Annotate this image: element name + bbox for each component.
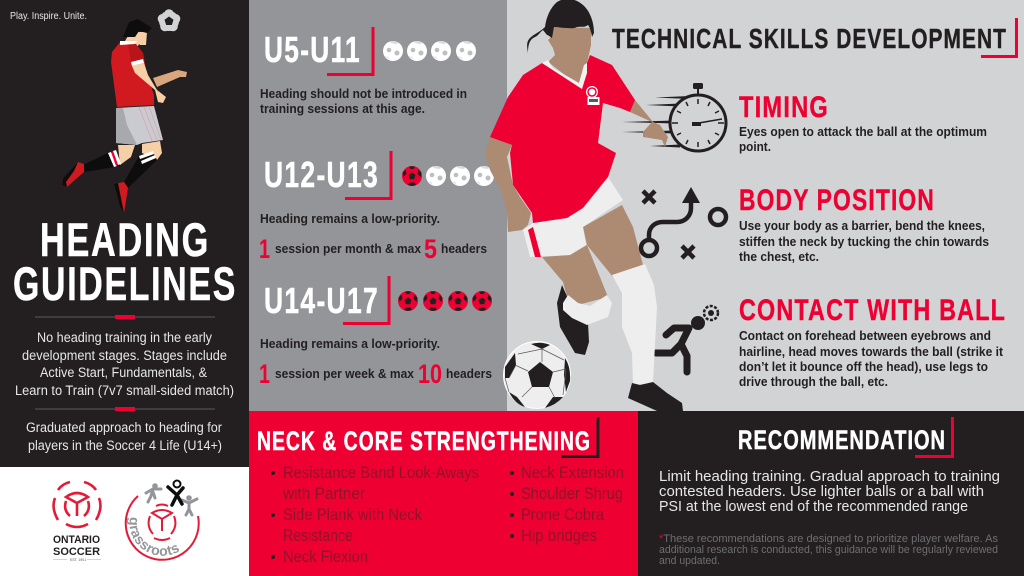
text block: early development stages: No heading training in the early [37, 330, 212, 345]
age group U12-U13: 1 [259, 234, 270, 264]
title: HEADING [40, 213, 210, 266]
skill: timing [739, 91, 987, 154]
skill: timing: TIMING [739, 91, 829, 124]
age group U5-U11: U5-U11 [264, 29, 361, 70]
panel: logos [0, 467, 249, 576]
skill: contact with ball: don’t let it bounce off the head), use legs to [739, 359, 988, 374]
skill: contact with ball: hairline, head moves towards the ball (strike it [739, 344, 1004, 359]
text block: graduated approach: players in the Soccer 4 Life (U14+) [28, 438, 222, 453]
list: left column exercises: Resistance Band Look-Aways [283, 463, 479, 482]
age group U14-U17: 10 [418, 359, 442, 389]
text block: early development stages: Learn to Train (7v7 small-sided match) [15, 383, 234, 398]
panel: heading guidelines sidebar [0, 0, 249, 468]
text block: early development stages: Active Start, Fundamentals, & [40, 365, 207, 380]
footnote: additional research is conducted, this guidance will be regularly reviewed [659, 544, 998, 556]
list: left column exercises: Side Plank with Neck [283, 505, 422, 524]
list: left column exercises: with Partner [282, 484, 365, 503]
age group U12-U13 [259, 151, 494, 264]
illustration: soccer ball [504, 342, 570, 408]
logo: Ontario Soccer: SOCCER [53, 546, 100, 558]
age group U12-U13: U12-U13 [264, 154, 379, 195]
logo: grassroots [124, 480, 200, 561]
text block: graduated approach: Graduated approach to heading for [26, 420, 222, 435]
age group U14-U17: U14-U17 [264, 280, 379, 321]
skill: body position: Use your body as a barrier, bend the knees, [739, 218, 985, 233]
text block: recommendation: Limit heading training. Gradual approach to training [659, 468, 1000, 485]
title [13, 213, 237, 310]
tagline: Play. Inspire. Unite. [10, 11, 87, 22]
logo: Ontario Soccer: EST. 1901 [70, 558, 86, 562]
skill: body position: BODY POSITION [739, 184, 935, 217]
panel: neck and core strengthening [249, 411, 638, 576]
footnote: and updated. [659, 555, 720, 567]
age group U12-U13: 5 [424, 234, 437, 264]
footnote [659, 533, 998, 567]
title: GUIDELINES [13, 257, 237, 310]
skill: body position: stiffen the neck by tucking the chin towards [739, 234, 989, 249]
text block: recommendation: PSI at the lowest end of the recommended range [659, 498, 968, 515]
panel: age groups [249, 0, 507, 411]
list: right column exercises: Shoulder Shrug [521, 484, 623, 503]
list: left column exercises: Resistance [283, 526, 353, 545]
list: left column exercises: Neck Flexion [283, 547, 368, 566]
text block: graduated approach [26, 420, 222, 453]
heading: neck and core: NECK & CORE STRENGTHENING [257, 426, 591, 456]
age group U14-U17: headers [446, 366, 492, 381]
icon: runner heading ball [656, 306, 718, 372]
age group U14-U17 [259, 276, 492, 389]
skill: body position [739, 184, 989, 264]
skill: body position: the chest, etc. [739, 249, 819, 264]
illustration: player heading the ball [62, 19, 187, 213]
heading: neck and core [257, 417, 598, 456]
text block: early development stages: development stages. Stages include [22, 348, 227, 363]
list: left column exercises [271, 463, 479, 566]
skill: timing: point. [739, 139, 771, 154]
skill: contact with ball: Contact on forehead between eyebrows and [739, 328, 991, 343]
text block: recommendation: contested headers. Use lighter balls or a ball with [659, 483, 984, 500]
panel: technical skills development [507, 0, 1024, 411]
logo: Ontario Soccer [53, 482, 101, 562]
logo: Ontario Soccer: ONTARIO [53, 534, 100, 546]
heading: recommendation [738, 417, 952, 456]
icon: stopwatch [622, 83, 726, 151]
age group U12-U13: headers [441, 241, 487, 256]
age group U5-U11: Heading should not be introduced in [260, 86, 467, 101]
age group U5-U11: training sessions at this age. [260, 101, 425, 116]
age group U12-U13: session per month & max [275, 241, 422, 256]
logo: grassroots: grassroots [126, 518, 179, 556]
age group U14-U17: 1 [259, 359, 270, 389]
age group U14-U17: session per week & max [275, 366, 415, 381]
age group U5-U11 [260, 27, 476, 116]
text block: early development stages [15, 330, 234, 398]
age group U14-U17: Heading remains a low-priority. [260, 336, 440, 351]
list: right column exercises [510, 463, 624, 545]
skill: timing: Eyes open to attack the ball at the optimum [739, 124, 987, 139]
icon: tactics play diagram [641, 187, 726, 258]
list: right column exercises: Neck Extension [521, 463, 624, 482]
heading: recommendation: RECOMMENDATION [738, 425, 946, 455]
skill: contact with ball: drive through the ball, etc. [739, 374, 888, 389]
list: right column exercises: Hip bridges [521, 526, 597, 545]
icon: header ball [158, 9, 180, 31]
list: right column exercises: Prone Cobra [521, 505, 604, 524]
age group U12-U13: Heading remains a low-priority. [260, 211, 440, 226]
panel: recommendation [638, 411, 1024, 576]
footnote: *These recommendations are designed to prioritize player welfare. As [659, 533, 998, 545]
skill: contact with ball [739, 294, 1006, 389]
text block: recommendation [659, 468, 1000, 515]
illustration: female player dribbling [485, 0, 683, 411]
